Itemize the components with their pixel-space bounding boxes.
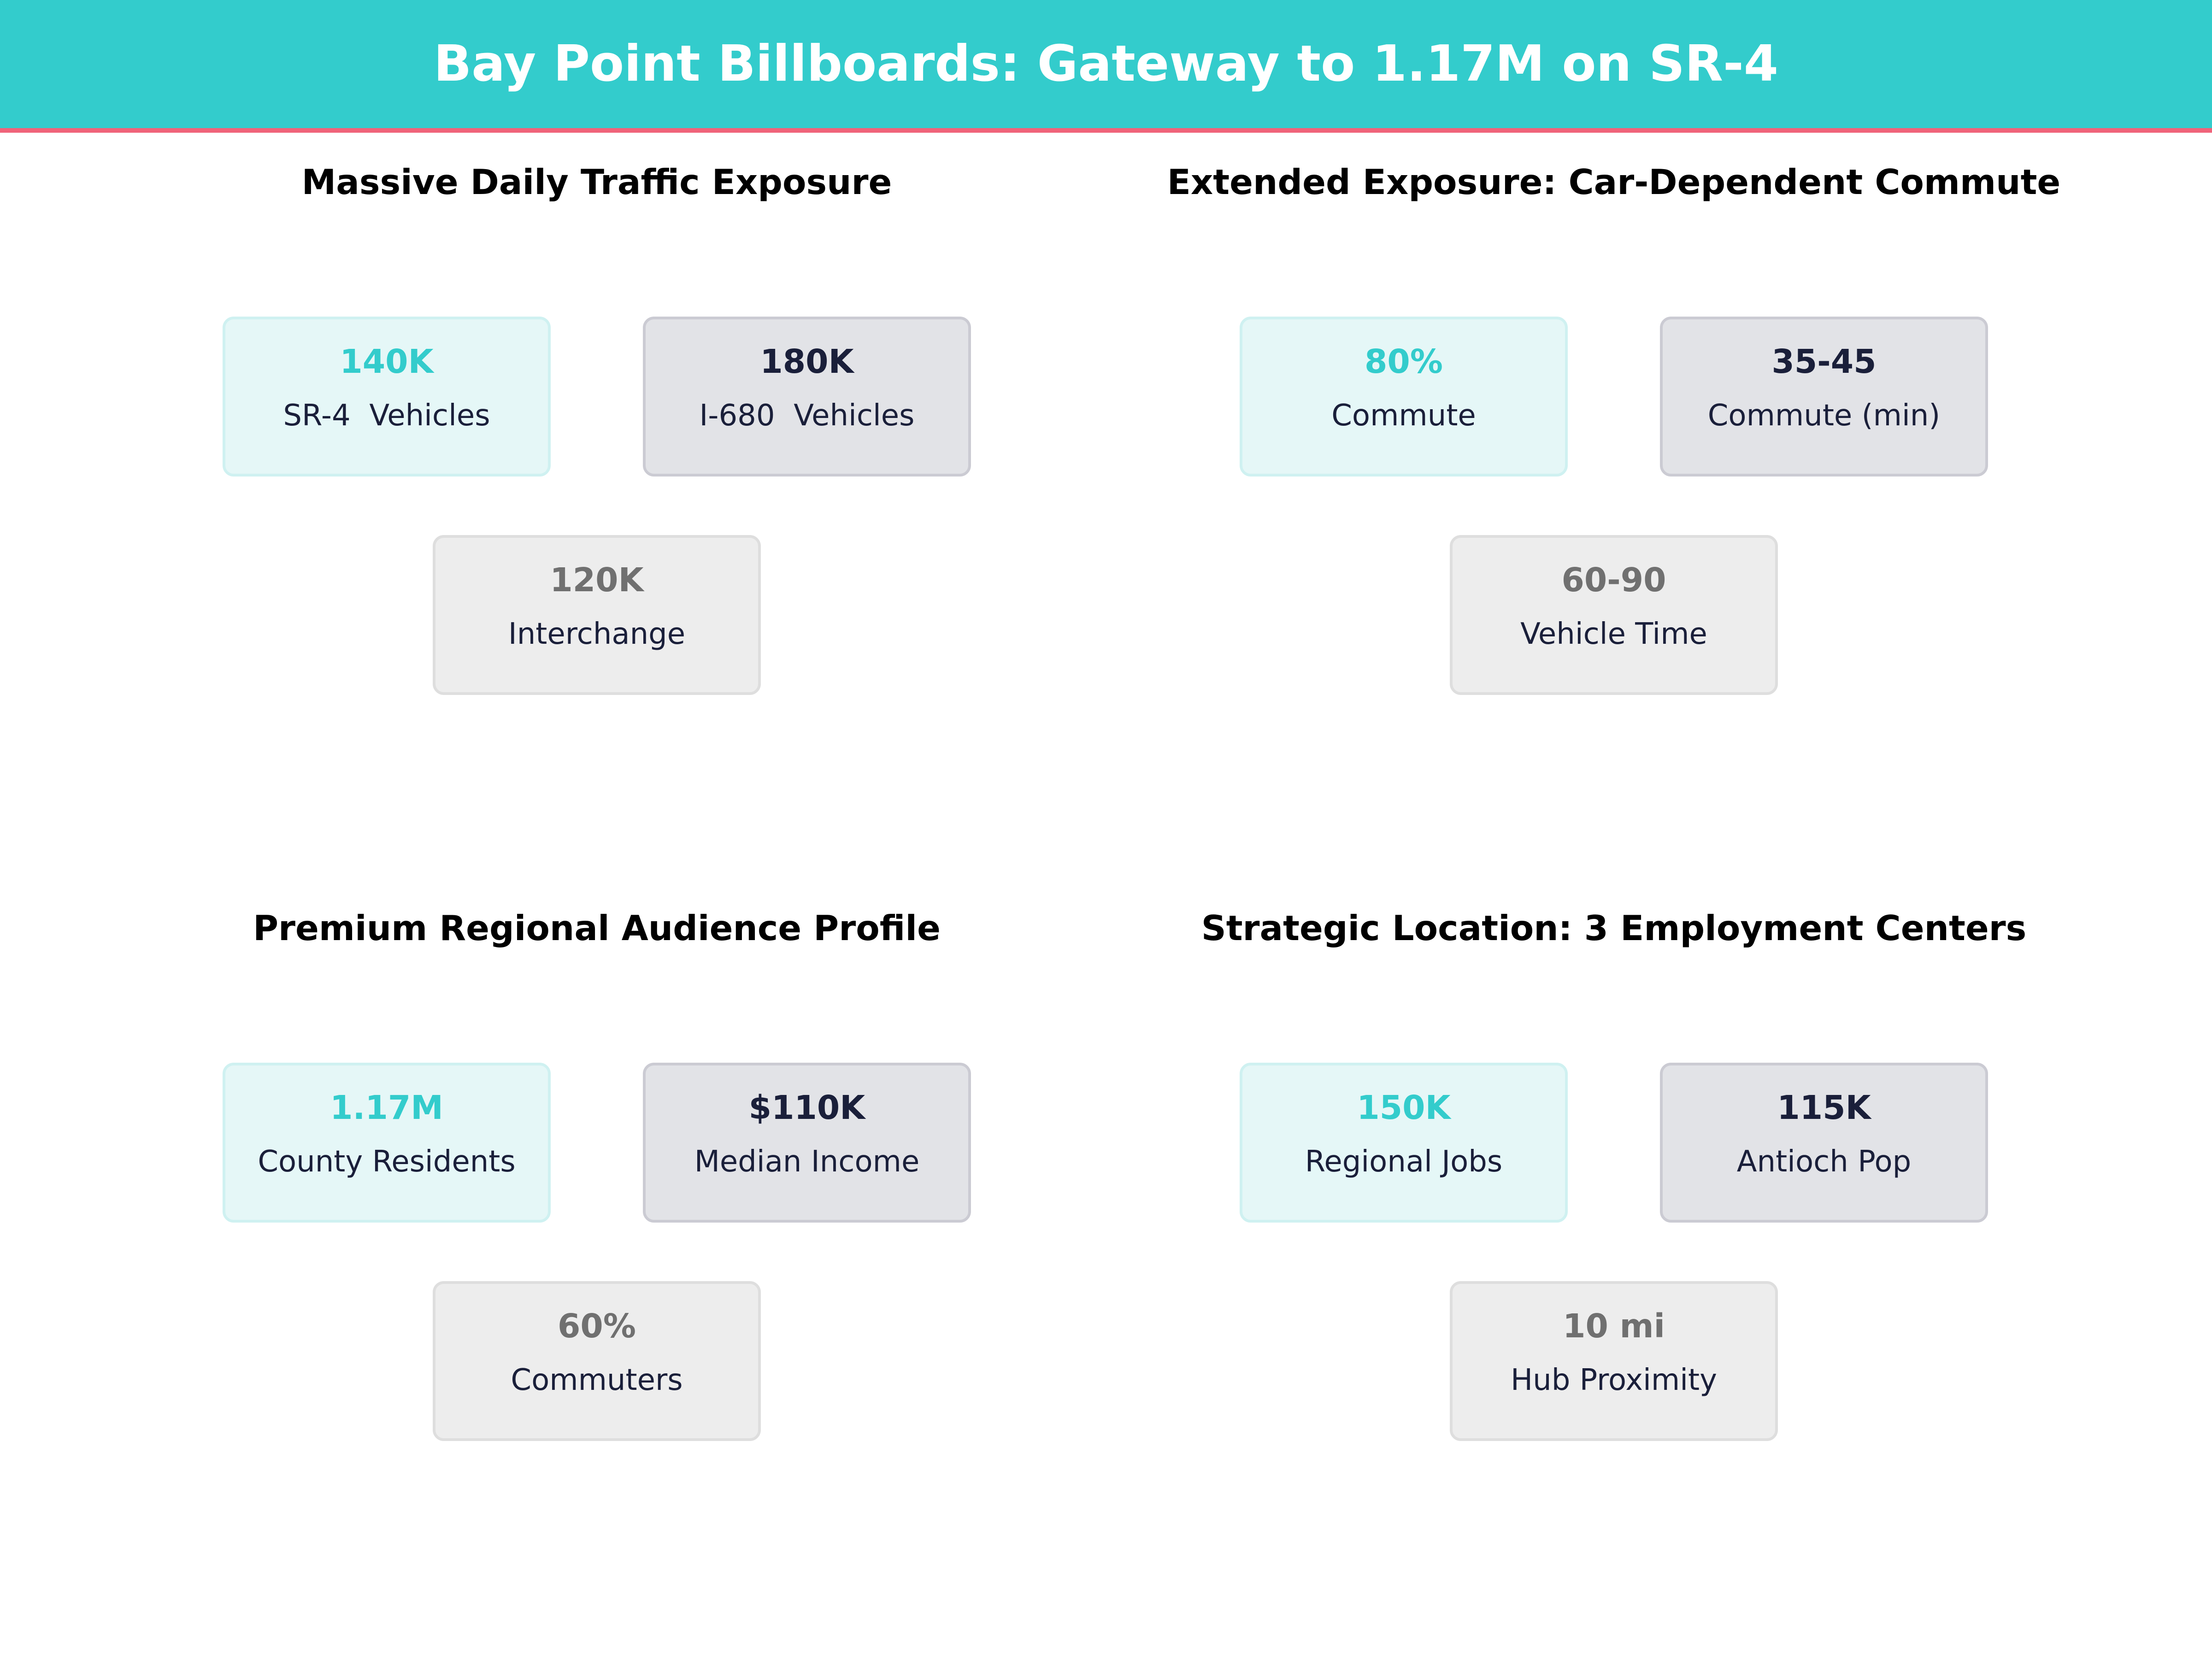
panel: commute — [1107, 157, 2121, 700]
panel: location — [1107, 903, 2121, 1447]
card: 120K: 120K — [550, 561, 644, 599]
card: 120K: Interchange — [508, 617, 685, 651]
card: 140K: SR-4 Vehicles — [283, 399, 490, 433]
card: 180K: 180K — [760, 342, 854, 381]
heading: commute: Extended Exposure: Car-Dependent Commute — [1167, 162, 2060, 202]
card: 150K: 150K — [1357, 1088, 1451, 1127]
card: 150K: Regional Jobs — [1305, 1145, 1502, 1179]
card: 180K: I-680 Vehicles — [699, 399, 915, 433]
card: 10 mi — [1450, 1281, 1778, 1441]
card: 60-90: 60-90 — [1561, 561, 1666, 599]
header: Bay Point Billboards: Gateway to 1.17M on SR-4 — [434, 35, 1778, 93]
panel: audience — [90, 903, 1104, 1447]
card: 1.17M: 1.17M — [330, 1088, 443, 1127]
card: 80%: 80% — [1365, 342, 1443, 381]
card: $110K — [643, 1063, 971, 1223]
card: 1.17M: County Residents — [258, 1145, 516, 1179]
card: 80% — [1240, 317, 1568, 477]
card: 35-45: 35-45 — [1771, 342, 1877, 381]
card: 60-90 — [1450, 535, 1778, 695]
card: 35-45: Commute (min) — [1708, 399, 1940, 433]
card: 10 mi: Hub Proximity — [1511, 1363, 1717, 1397]
card: 115K: 115K — [1777, 1088, 1871, 1127]
card: 10 mi: 10 mi — [1563, 1307, 1665, 1345]
card: 180K — [643, 317, 971, 477]
card: 60%: 60% — [558, 1307, 636, 1345]
card: 140K: 140K — [340, 342, 434, 381]
header — [0, 0, 2212, 133]
card: 60%: Commuters — [511, 1363, 683, 1397]
card: 35-45 — [1660, 317, 1988, 477]
card: 115K: Antioch Pop — [1737, 1145, 1911, 1179]
heading: traffic: Massive Daily Traffic Exposure — [302, 162, 892, 202]
card: 115K — [1660, 1063, 1988, 1223]
card: 60-90: Vehicle Time — [1520, 617, 1707, 651]
panel: traffic — [90, 157, 1104, 700]
card: $110K: Median Income — [694, 1145, 919, 1179]
card: 1.17M — [223, 1063, 551, 1223]
card: 60% — [433, 1281, 761, 1441]
card: 150K — [1240, 1063, 1568, 1223]
card: $110K: $110K — [749, 1088, 865, 1127]
heading: audience: Premium Regional Audience Profile — [253, 908, 941, 948]
card: 80%: Commute — [1331, 399, 1476, 433]
card: 140K — [223, 317, 551, 477]
heading: location: Strategic Location: 3 Employment Centers — [1201, 908, 2026, 948]
card: 120K — [433, 535, 761, 695]
